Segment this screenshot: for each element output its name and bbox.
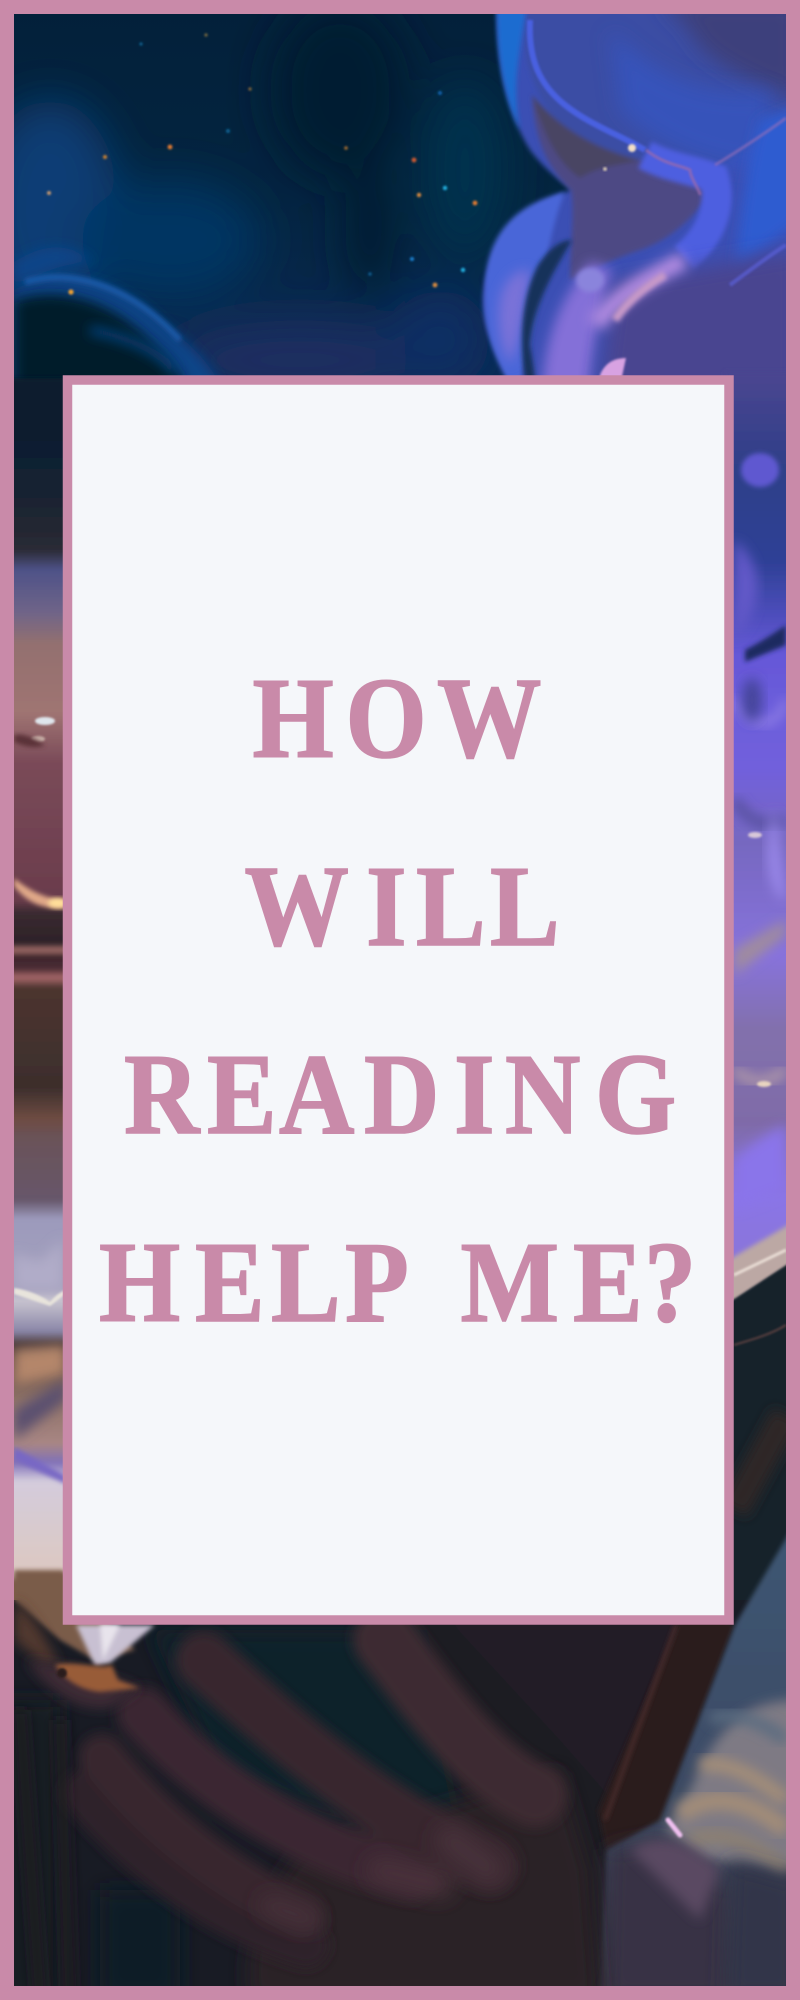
painting: left dark swirl — [14, 247, 225, 395]
painting: right strip smoke — [725, 372, 800, 1660]
title: how will reading help me?: WILL — [245, 842, 560, 970]
title: how will reading help me?: HOW — [253, 654, 541, 782]
title: how will reading help me? — [99, 654, 696, 1346]
painting: stars — [47, 33, 477, 295]
title: how will reading help me?: READING — [124, 1030, 676, 1158]
sleeve at right — [600, 1515, 800, 2000]
book pages at left — [14, 1570, 135, 1660]
painting: left strip portrait — [0, 378, 80, 1625]
panel background with pink border — [68, 380, 729, 1620]
painting: bottom dark book and hand — [0, 1515, 800, 2000]
title: how will reading help me?: HELP ME? — [99, 1218, 696, 1346]
painting: night sky — [0, 0, 800, 400]
fingers — [84, 1640, 535, 1945]
palm — [247, 1770, 600, 2000]
painting: blue and violet smoke — [483, 0, 800, 395]
book spine — [598, 1610, 735, 1850]
central text panel — [68, 380, 729, 1620]
